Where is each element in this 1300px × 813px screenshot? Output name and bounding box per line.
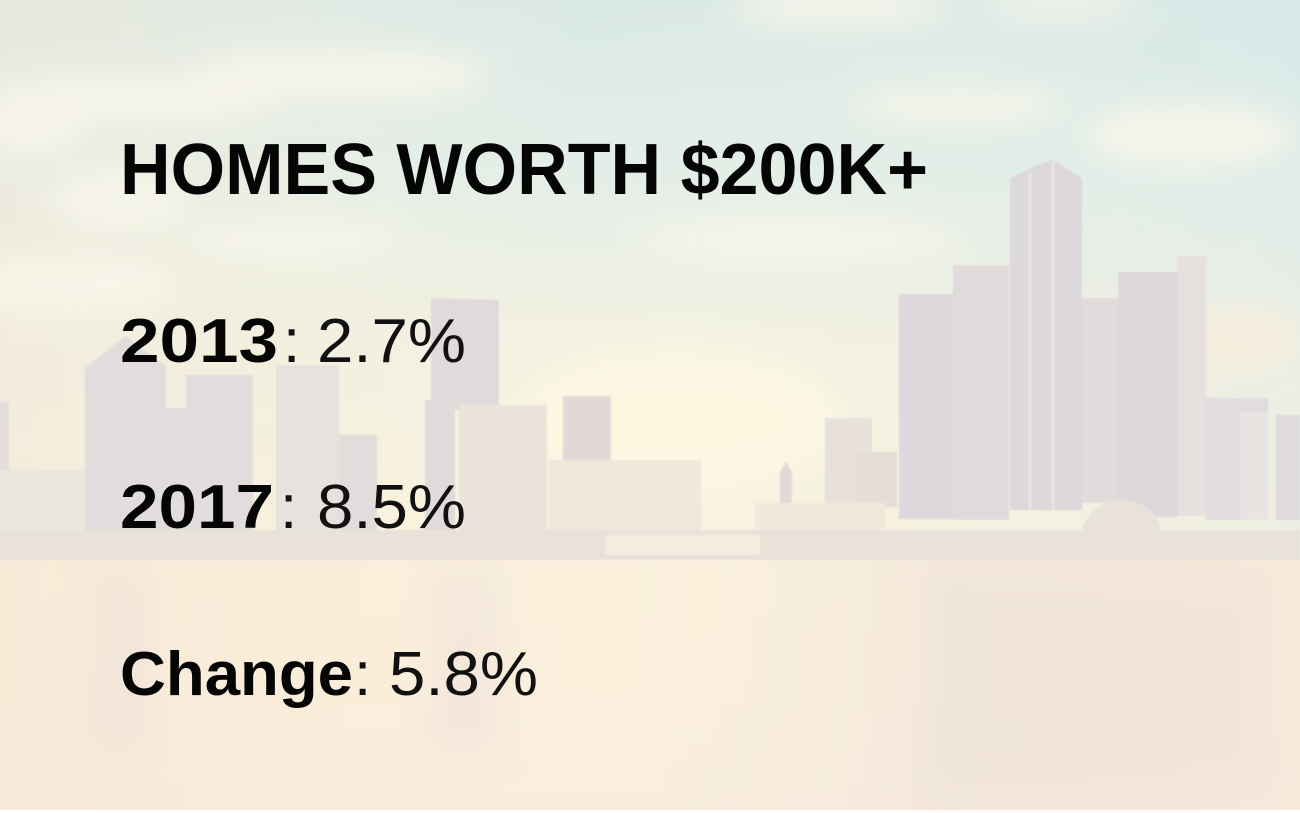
stat: change: : xyxy=(354,640,371,709)
background: clouds xyxy=(0,0,1300,490)
stat: 2013: : xyxy=(283,307,300,376)
background: river water xyxy=(0,560,1300,810)
stat: 2017: 8.5% xyxy=(317,473,466,542)
stat: change: Change xyxy=(120,640,353,709)
skyline: buildings xyxy=(0,160,1300,560)
stat: 2013: 2.7% xyxy=(317,307,466,376)
background: sky xyxy=(0,0,1300,562)
heading: HOMES WORTH $200K+ xyxy=(120,130,928,210)
background: building reflections xyxy=(90,570,1270,790)
stat: 2017: 2017 xyxy=(120,473,274,542)
stat: 2017: : xyxy=(280,473,297,542)
stat: change xyxy=(120,640,538,709)
stat: 2017 xyxy=(120,473,466,542)
stat: change: 5.8% xyxy=(389,640,538,709)
stat: 2013: 2013 xyxy=(120,307,278,376)
stat: 2013 xyxy=(120,307,466,376)
